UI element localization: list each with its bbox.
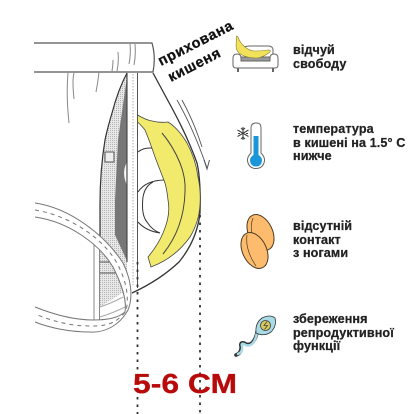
dotted measure lines <box>138 215 200 414</box>
round shapes inside pocket <box>138 148 165 233</box>
benefit text: freedom: відчуй <box>293 43 335 57</box>
pocket outline <box>132 73 200 293</box>
inner dotted panel <box>100 73 128 307</box>
benefit text: freedom: свободу <box>293 57 346 71</box>
pocket label: прихована <box>156 18 237 70</box>
benefit text: no contact <box>293 219 352 260</box>
benefit text: temperature: в кишені на 1.5° С <box>293 136 405 150</box>
benefit text: reproductive <box>293 312 394 353</box>
benefit text: reproductive: функції <box>293 339 340 353</box>
benefit text: temperature: температура <box>293 122 374 136</box>
text: кишеня <box>166 45 224 86</box>
leg band <box>35 203 131 332</box>
benefit text: reproductive: репродуктивної <box>293 326 394 340</box>
icon: two eggs <box>236 210 279 273</box>
icon: banana on sofa <box>233 36 278 72</box>
benefit text: temperature: нижче <box>293 149 332 163</box>
benefit text: no contact: відсутній <box>293 219 352 233</box>
waistband <box>34 43 154 123</box>
benefit text: reproductive: збереження <box>293 312 368 326</box>
banana <box>138 115 200 267</box>
benefit text: temperature <box>293 122 406 163</box>
measurement label: 5-6 СМ <box>133 368 237 399</box>
centre seam strip <box>128 73 138 288</box>
benefit text: freedom <box>293 43 346 71</box>
icon: sperm <box>236 316 276 355</box>
motion arrow <box>177 100 210 169</box>
benefit text: no contact: з ногами <box>293 246 348 260</box>
benefit text: no contact: контакт <box>293 233 341 247</box>
icon: thermometer with snowflake <box>238 123 265 168</box>
